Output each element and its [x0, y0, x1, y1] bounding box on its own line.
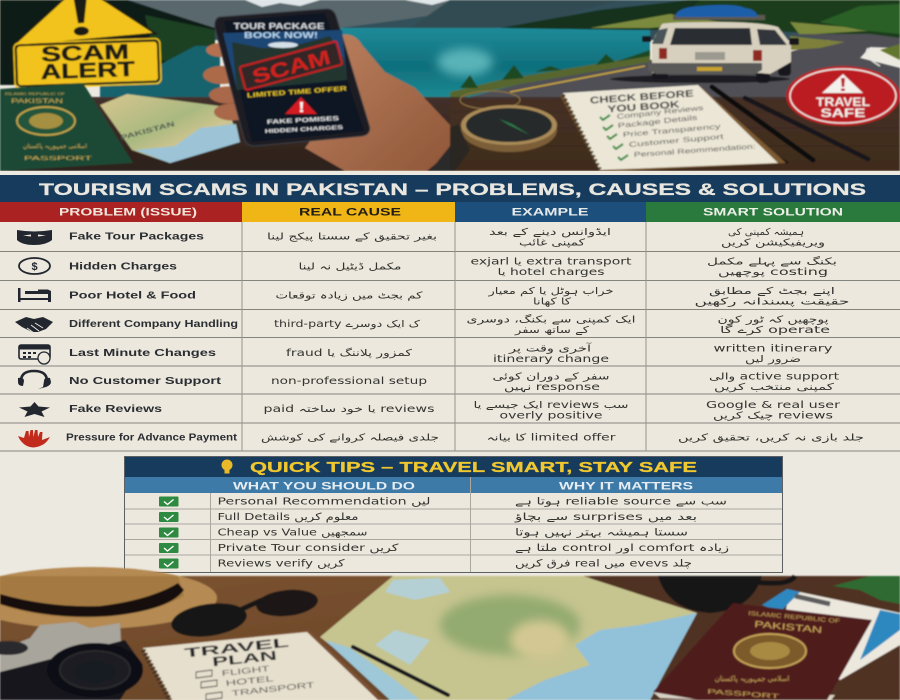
compass	[460, 91, 557, 152]
item two: Package Details	[617, 115, 699, 130]
item three: Price Transparency	[623, 123, 722, 139]
label: Fake Reviews	[69, 404, 163, 415]
snow caps	[245, 0, 450, 7]
maroon passport	[653, 603, 872, 700]
icon: light bulb	[222, 460, 232, 474]
emblem inner	[750, 642, 790, 660]
screen mountain	[232, 36, 347, 90]
tips body	[124, 456, 782, 572]
mask eyes	[23, 234, 46, 236]
notebook page	[143, 632, 378, 700]
limited offer: LIMITED TIME OFFER	[247, 85, 347, 99]
solution: جلد بازی نہ کریں، تحقیق کریں	[678, 432, 864, 444]
row: hidden charges	[19, 256, 837, 278]
label: No Customer Support	[69, 376, 222, 387]
tickets	[762, 589, 900, 680]
table background	[0, 222, 900, 451]
passport cover	[653, 603, 872, 700]
passport name: PAKISTAN	[754, 619, 823, 635]
row: no customer support	[18, 371, 839, 393]
pen	[353, 647, 448, 695]
land light	[510, 620, 570, 660]
left mirror side window	[652, 28, 668, 44]
phone title two: BOOK NOW!	[244, 31, 318, 40]
palm	[305, 34, 450, 171]
screen clouds	[268, 42, 298, 48]
check mark	[164, 546, 174, 551]
left lens	[169, 599, 249, 641]
hidden charges: HIDDEN CHARGES	[265, 125, 344, 135]
tip text: Private Tour consider کریں	[218, 543, 399, 554]
left forest	[0, 0, 215, 85]
lens	[47, 643, 143, 697]
right bright trees	[820, 4, 900, 34]
calendar grid	[23, 352, 36, 358]
calendar clock	[38, 352, 50, 364]
side windows	[757, 29, 787, 45]
passport top text: ISLAMIC REPUBLIC OF	[5, 91, 66, 96]
scam alert sign	[10, 0, 161, 89]
strip under photo	[0, 171, 900, 175]
passport small line: ISLAMIC REPUBLIC OF	[748, 611, 841, 625]
passport urdu: اسلامی جمہوریہ پاکستان	[23, 143, 87, 150]
icon: dollar coin	[19, 258, 50, 274]
mirrors	[642, 36, 651, 42]
red cell	[0, 202, 242, 222]
green passport	[0, 83, 133, 171]
body	[652, 22, 791, 74]
sea	[505, 613, 697, 700]
compass base	[461, 108, 557, 152]
tip row two	[159, 512, 697, 523]
barcode	[795, 596, 830, 604]
ticks	[600, 115, 628, 160]
tips subheader band	[125, 477, 782, 493]
tip reason: سب سے reliable source ہوتا ہے	[515, 496, 727, 508]
main lake	[340, 28, 650, 98]
solution second line: حقیقت پسندانہ رکھیں	[694, 296, 850, 308]
van group	[610, 5, 799, 83]
plate recess	[695, 52, 725, 60]
right lens	[255, 587, 319, 619]
example second line: hotel charges یا	[498, 267, 605, 278]
shore grass	[450, 55, 650, 100]
check mark	[164, 562, 174, 566]
sign body	[16, 40, 159, 86]
solution second line: reviews چیک کریں	[713, 410, 833, 422]
forest slope green	[145, 15, 215, 62]
passport name: PAKISTAN	[11, 98, 64, 105]
cause: جلدی فیصلہ کروانے کی کوشش	[261, 432, 439, 444]
label: Last Minute Changes	[69, 348, 217, 359]
passport word: PASSPORT	[24, 156, 93, 162]
stamp box	[240, 41, 342, 90]
hat brim	[0, 567, 217, 629]
pen two shadow	[740, 140, 788, 163]
emblem centre	[29, 113, 63, 129]
example: limited offer کا بیانہ	[486, 432, 616, 444]
item flight: FLIGHT	[221, 664, 270, 678]
solution: ہمیشہ کمپنی کی	[728, 227, 804, 238]
exclamation mark	[73, 0, 88, 23]
pens	[712, 87, 868, 163]
finger four	[214, 104, 250, 120]
passport word: PASSPORT	[707, 689, 779, 700]
stamp text: SCAM	[250, 47, 333, 89]
tip reason: زیادہ comfort اور control ملتا ہے	[515, 543, 729, 554]
solution: اپنے بجٹ کے مطابق	[709, 286, 835, 297]
item one: Company Reviews	[616, 105, 704, 121]
item five: Personal Reommendation:	[634, 143, 756, 159]
lens ring	[60, 651, 130, 689]
subheader right: WHY IT MATTERS	[559, 480, 693, 492]
far lake	[100, 46, 220, 100]
tip row five	[159, 558, 692, 570]
hand holding phone	[203, 34, 450, 171]
example: exjarl یا extra transport	[470, 256, 632, 268]
icon: bed	[18, 288, 51, 302]
badge safe: SAFE	[820, 106, 866, 120]
row: fake reviews	[19, 400, 840, 422]
title text: TOURISM SCAMS IN PAKISTAN – PROBLEMS, CAUSES & SOLUTIONS	[39, 180, 866, 199]
fake promises: FAKE POMISES	[267, 116, 339, 126]
tip text: Full Details معلوم کریں	[218, 512, 358, 523]
right grass	[880, 44, 900, 60]
cup handle	[755, 576, 795, 583]
mirror right	[789, 38, 799, 45]
spiral	[143, 650, 170, 700]
grass patches	[590, 14, 880, 35]
emblem	[734, 634, 806, 668]
right desk	[590, 576, 900, 700]
panel: quick tips	[124, 456, 782, 572]
bulb glass	[222, 460, 232, 470]
item four: Customer Support	[629, 134, 724, 149]
compass rings	[460, 91, 520, 109]
solution second line: costing پوچھیں	[718, 267, 828, 278]
spiral	[563, 95, 600, 170]
example: خراب ہوٹل یا کم معیار	[487, 286, 614, 297]
check mark	[164, 515, 174, 520]
label: Poor Hotel & Food	[69, 290, 196, 302]
plan title: TRAVEL	[184, 635, 290, 660]
tips title: QUICK TIPS – TRAVEL SMART, STAY SAFE	[250, 459, 697, 476]
header green	[646, 202, 900, 222]
row: fake tour packages	[17, 227, 825, 248]
tip text: Cheap vs Value سمجھیں	[218, 528, 368, 538]
calendar header	[19, 345, 50, 350]
hat crown	[0, 576, 184, 618]
right hill forest	[640, 0, 900, 40]
green label: SMART SOLUTION	[703, 206, 843, 218]
badge mark	[841, 78, 845, 91]
badge disc	[786, 66, 900, 126]
badge triangle	[822, 74, 863, 93]
phone body	[215, 9, 370, 146]
example: ایڈوانس دینے کے بعد	[489, 227, 611, 238]
yellow label: REAL CAUSE	[299, 206, 401, 218]
notebook heading	[590, 88, 695, 117]
finger one	[206, 43, 238, 57]
compass rim	[461, 105, 557, 145]
table	[0, 97, 900, 171]
shadow	[610, 75, 790, 83]
yellow cell	[242, 202, 455, 222]
solution second line: ضرور لیں	[745, 354, 801, 365]
sea left	[325, 640, 420, 700]
check box	[159, 496, 178, 506]
icon: red hand	[18, 430, 50, 448]
map sheet	[100, 94, 240, 163]
checkboxes	[196, 670, 222, 700]
compass face	[466, 108, 552, 142]
scam stamp	[240, 41, 343, 91]
verge	[790, 36, 845, 50]
notebook cover	[140, 630, 384, 700]
check box	[159, 558, 178, 568]
item transport: TRANSPORT	[231, 680, 315, 698]
passport cover	[0, 83, 133, 171]
example: ایک کمپنی سے بکنگ، دوسری	[466, 314, 636, 326]
header yellow	[242, 202, 455, 222]
screen	[224, 13, 364, 142]
check box	[159, 543, 178, 553]
distant forest	[500, 0, 760, 30]
camera body	[0, 640, 143, 700]
table right patch	[450, 100, 900, 171]
label: Pressure for Advance Payment	[66, 432, 238, 444]
solution second line: operate کرے گا	[720, 324, 830, 336]
photo: travel planning desk	[0, 567, 900, 700]
compass needle	[499, 119, 530, 135]
solution: پوچھیں کہ ٹور کون	[718, 314, 829, 326]
hat band	[0, 583, 184, 617]
blue cell	[455, 202, 646, 222]
solution second line: کمپنی منتخب کریں	[714, 382, 835, 393]
rear window	[670, 28, 752, 45]
badge ring	[790, 69, 896, 123]
sleeve cuff	[450, 124, 470, 171]
road	[450, 34, 900, 110]
yellow plate	[697, 67, 722, 71]
taillight right	[753, 50, 762, 61]
tip text: Personal Recommendation لیں	[218, 496, 431, 508]
outer yellow edge	[14, 38, 161, 88]
cause: کم بجٹ میں زیادہ توقعات	[276, 290, 423, 302]
badge travel: TRAVEL	[816, 95, 870, 109]
icon: handshake	[15, 317, 53, 332]
heading one: CHECK BEFORE	[590, 88, 694, 107]
cause: مکمل ڈیٹیل نہ لینا	[298, 262, 402, 272]
lake reflection	[437, 48, 493, 76]
label: Hidden Charges	[69, 262, 178, 272]
example second line: کمپنی غائب	[519, 238, 586, 248]
icon: mask	[17, 230, 52, 245]
sign roof	[10, 0, 156, 47]
sleeve	[430, 146, 450, 171]
dollar sign: $	[31, 261, 38, 273]
check mark	[164, 500, 174, 504]
desk	[0, 576, 900, 700]
main table	[0, 202, 900, 451]
text alert: ALERT	[40, 58, 135, 84]
coffee cup	[658, 576, 795, 613]
cause: reviews یا خود ساختہ paid	[264, 404, 435, 415]
handshake fingers	[27, 323, 43, 333]
wheels	[652, 66, 668, 79]
screen photo	[223, 30, 347, 90]
camera top	[0, 622, 122, 675]
label: Different Company Handling	[69, 319, 238, 330]
example second line: response نہیں	[504, 382, 600, 393]
tip reason: بعد میں surprises سے بچاؤ	[513, 512, 697, 523]
bridge	[240, 600, 262, 610]
luggage	[676, 5, 758, 17]
exclamation dot	[74, 26, 89, 36]
photo: scam alert travel banner	[0, 0, 900, 172]
land	[440, 595, 580, 655]
check box	[159, 512, 178, 522]
item hotel: HOTEL	[225, 674, 275, 688]
solution second line: ویریفیکیشن کریں	[721, 238, 825, 248]
notebook cover	[560, 86, 786, 172]
bulb base	[224, 470, 230, 474]
row: different company handling	[15, 314, 830, 336]
plant	[833, 576, 900, 604]
finger two	[203, 66, 241, 84]
check box	[159, 528, 178, 538]
warning triangle	[285, 97, 317, 114]
ticket blue edge	[762, 589, 900, 660]
band fill	[0, 175, 900, 202]
bumper	[648, 63, 762, 74]
passport urdu: اسلامی جمہوریہ پاکستان	[715, 675, 789, 683]
heading two: YOU BOOK	[607, 99, 680, 115]
sunglasses	[169, 587, 319, 641]
tip text: Reviews verify کریں	[218, 558, 345, 570]
text scam: SCAM	[41, 40, 129, 67]
example: سفر کے دوران کوئی	[492, 372, 610, 382]
ticket white	[780, 590, 900, 680]
rack	[673, 15, 765, 20]
green cell	[646, 202, 900, 222]
sea upper	[375, 578, 450, 665]
check mark	[164, 530, 174, 536]
notebook checklist	[560, 85, 786, 172]
camera	[0, 622, 143, 700]
shoreline shrubs	[460, 50, 650, 88]
red label: PROBLEM (ISSUE)	[59, 206, 197, 218]
cause: کمزور پلاننگ یا fraud	[286, 347, 413, 359]
mountain range	[130, 0, 450, 28]
cause: non-professional setup	[271, 376, 427, 387]
title band	[0, 175, 900, 202]
map water	[135, 124, 240, 163]
tip row one	[159, 496, 727, 508]
finger three	[209, 86, 247, 104]
map sheet	[320, 576, 697, 700]
row: poor hotel and food	[18, 286, 850, 308]
passport edge	[653, 692, 835, 700]
header red	[0, 202, 242, 222]
taillights	[659, 48, 667, 59]
warning mark	[300, 102, 303, 112]
notebook travel plan	[140, 630, 384, 700]
example: آخری وقت پر	[507, 342, 592, 354]
emblem	[17, 107, 75, 135]
map pakistan	[100, 94, 240, 163]
example second line: overly positive	[500, 410, 603, 422]
row: pressure for advance payment	[18, 430, 864, 448]
wheel right	[756, 64, 770, 83]
map label: PAKISTAN	[120, 121, 176, 142]
pen one	[712, 87, 813, 160]
subheader left: WHAT YOU SHOULD DO	[233, 480, 416, 492]
plan title two: PLAN	[211, 648, 278, 669]
camera dial	[0, 641, 28, 655]
tips title band	[125, 457, 782, 477]
icon: star	[19, 402, 50, 417]
road yellow line	[510, 66, 645, 92]
tip row three	[159, 528, 688, 538]
travel safe badge	[786, 66, 900, 126]
road right edge	[866, 48, 880, 66]
headset cups	[18, 378, 51, 389]
solution: بکنگ سے پہلے مکمل	[707, 256, 837, 268]
cause: بغیر تحقیق کے سستا پیکج لینا	[267, 232, 437, 242]
phone title: TOUR PACKAGE	[234, 22, 325, 31]
icon: calendar	[19, 345, 50, 359]
tip row four	[159, 543, 729, 554]
large map	[320, 576, 697, 700]
tip reason: سستا ہمیشہ بہتر نہیں ہوتا	[515, 528, 688, 538]
hat	[0, 567, 217, 629]
mountains and sky	[0, 0, 900, 40]
solution: active support والی	[709, 372, 839, 382]
tip reason: چلد evevs میں real فرق کریں	[515, 558, 692, 570]
plank lines	[100, 112, 900, 150]
label: Fake Tour Packages	[69, 232, 205, 242]
cup	[658, 576, 762, 613]
example second line: کے ساتھ سفر	[514, 325, 590, 336]
header blue	[455, 202, 646, 222]
notebook page	[563, 85, 778, 170]
row: last minute changes	[19, 342, 833, 365]
icon: headset	[21, 371, 47, 381]
pen two	[745, 98, 868, 159]
example second line: کا کھانا	[533, 296, 572, 308]
cause: third-party ک ایک دوسرے	[274, 319, 421, 330]
wheel far	[778, 58, 791, 76]
solution: Google & real user	[706, 400, 840, 411]
lens glass	[75, 661, 115, 683]
example second line: itinerary change	[493, 354, 609, 365]
phone	[215, 9, 370, 146]
solution: written itinerary	[714, 344, 833, 354]
example: سب reviews ایک جیسے یا	[474, 400, 629, 411]
blue label: EXAMPLE	[512, 206, 588, 218]
dark slope	[410, 0, 620, 28]
